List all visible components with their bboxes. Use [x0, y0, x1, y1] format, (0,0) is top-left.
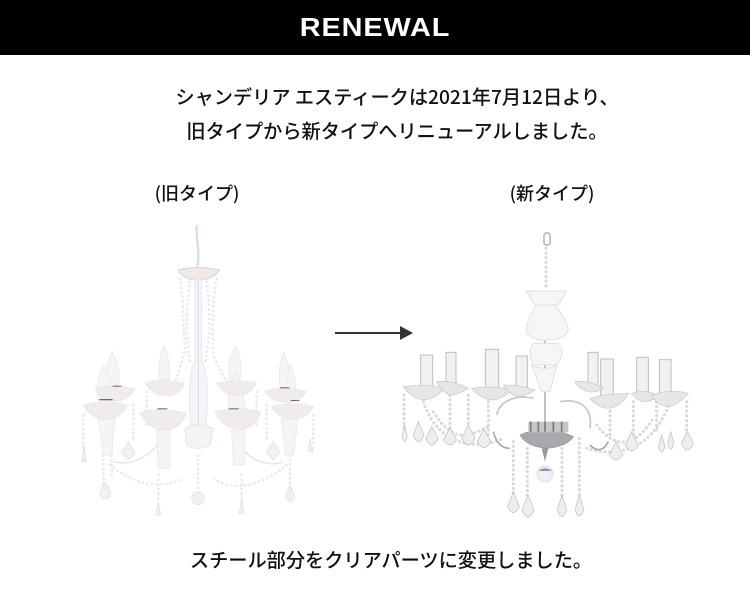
silver bowl [520, 422, 573, 482]
glass stem [526, 291, 568, 392]
intro text: シャンデリア エスティークは2021年7月12日より、 [175, 82, 619, 110]
candles [421, 349, 671, 399]
cups [403, 381, 688, 408]
dark bulb sockets [99, 386, 299, 409]
header banner [0, 0, 750, 55]
centre stem [178, 268, 219, 448]
intro text: 旧タイプから新タイプへリニューアルしました。 [186, 116, 608, 144]
title: RENEWAL [300, 12, 450, 42]
crystal drops [402, 422, 693, 517]
intro text [175, 82, 619, 144]
crystal drops [82, 438, 313, 515]
label: new type: (新タイプ) [510, 180, 594, 206]
bead strands [404, 248, 687, 498]
caption: スチール部分をクリアパーツに変更しました。 [190, 545, 592, 573]
chandelier: old type [82, 225, 314, 516]
arrow [335, 326, 413, 340]
candles and cups [83, 346, 313, 468]
chandelier: new type [402, 232, 694, 517]
label: old type: (旧タイプ) [155, 180, 239, 206]
